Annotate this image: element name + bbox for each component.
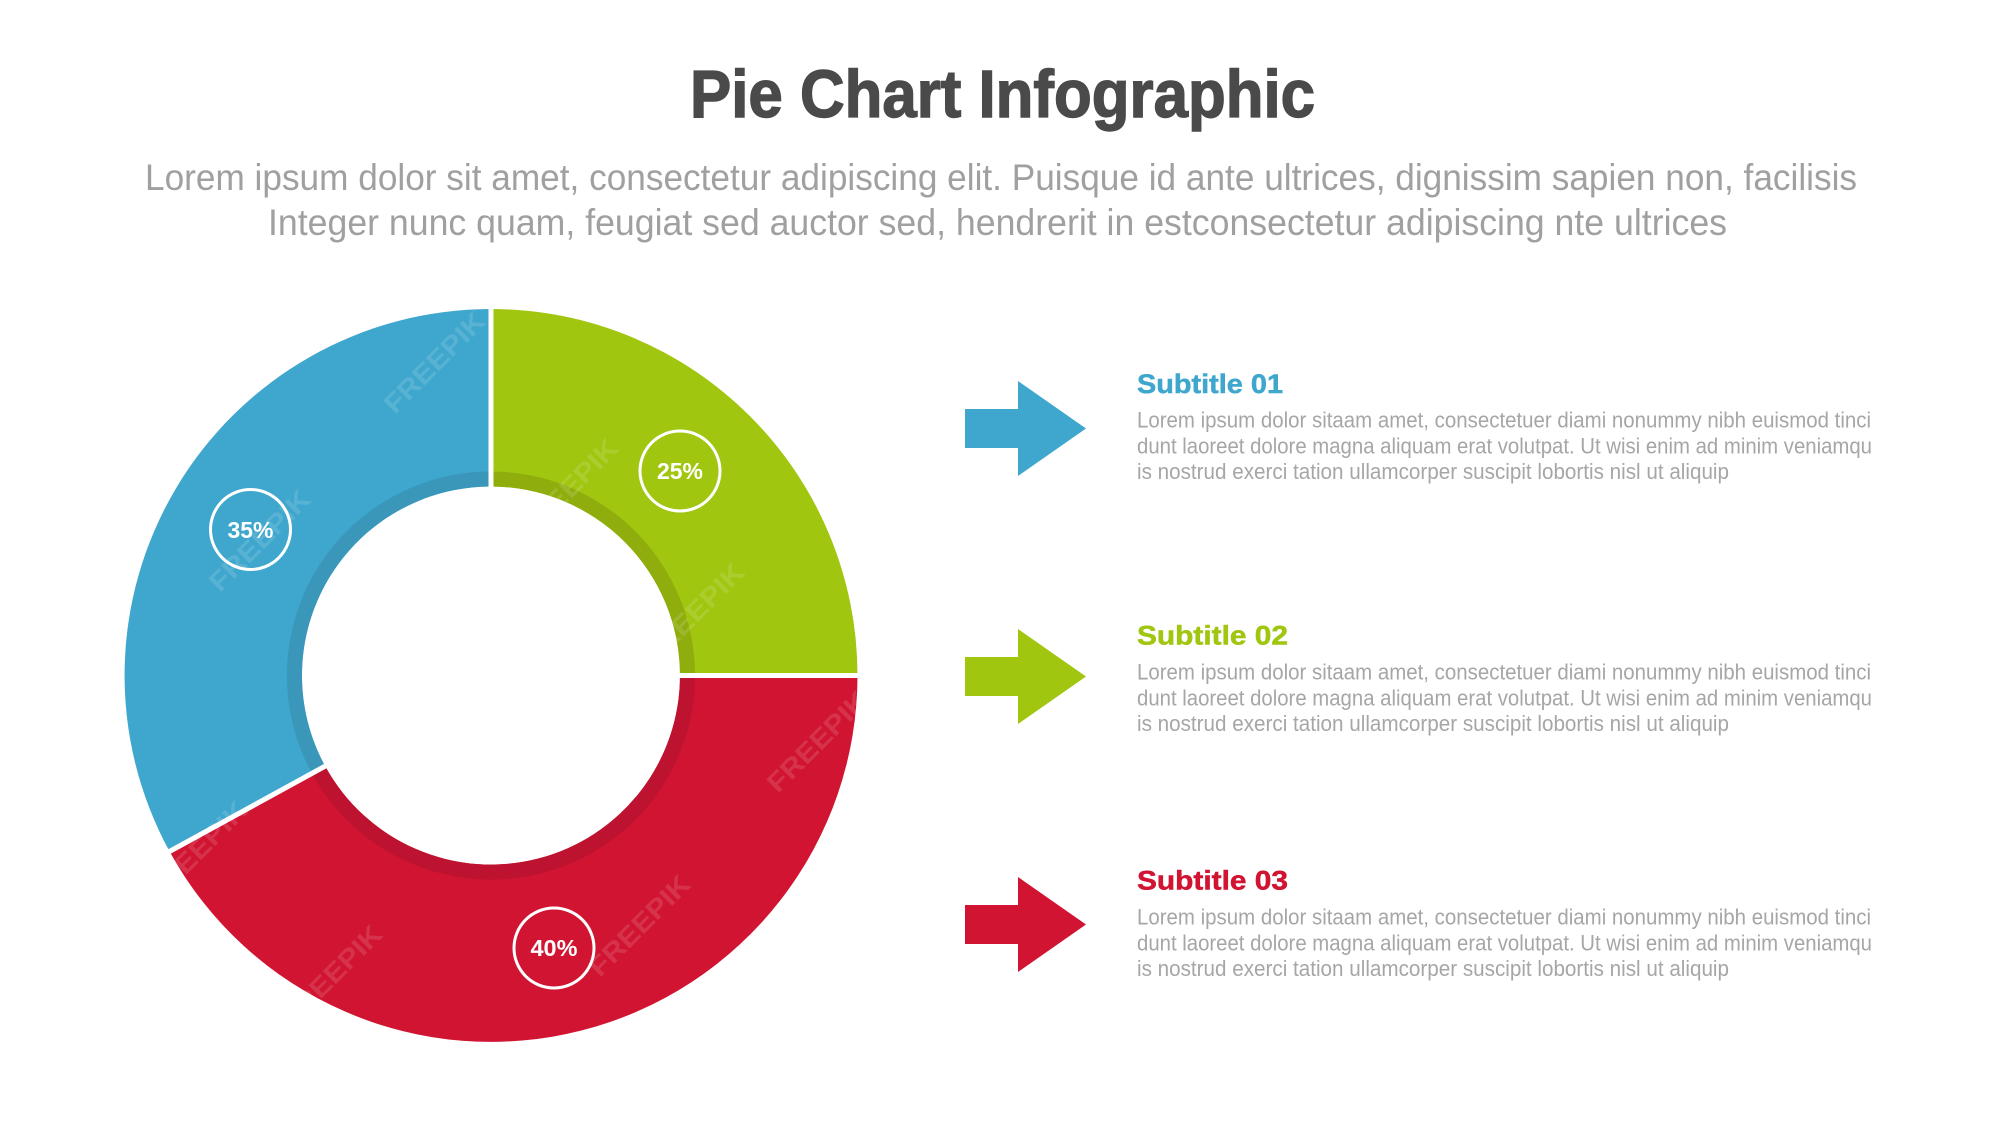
watermarks: FREEPIK	[203, 484, 317, 597]
badge: 35%: 35%	[228, 517, 274, 543]
text block: subtitle 02: Subtitle 02	[1137, 620, 1288, 650]
watermarks: FREEPIK	[378, 306, 492, 419]
text block: subtitle 01: Subtitle 01	[1137, 369, 1283, 399]
text block: subtitle 02: Lorem ipsum dolor sitaam amet, consectetuer diami nonummy nibh euismod tinci	[1137, 660, 1871, 684]
segment dividers	[164, 304, 862, 854]
intro text: Lorem ipsum dolor sit amet, consectetur adipiscing elit. Puisque id ante ultrices, dignissim sapien non, facilisis	[145, 157, 1857, 198]
watermarks	[140, 306, 875, 1032]
arrow: green	[965, 629, 1086, 724]
arrow: red	[965, 877, 1086, 972]
donut chart	[125, 304, 875, 1042]
watermarks: FREEPIK	[637, 557, 751, 670]
segment: blue 35%	[125, 309, 491, 852]
text block: subtitle 03: Lorem ipsum dolor sitaam amet, consectetuer diami nonummy nibh euismod tinci	[1137, 904, 1871, 930]
text block: subtitle 03: is nostrud exerci tation ullamcorper suscipit lobortis nisl ut aliquip	[1137, 956, 1729, 981]
watermarks: FREEPIK	[583, 869, 697, 982]
inner shadow band: green	[491, 472, 695, 676]
text block: subtitle 03: dunt laoreet dolore magna aliquam erat volutpat. Ut wisi enim ad minim veniamqu	[1137, 930, 1872, 956]
title: Pie Chart Infographic	[690, 57, 1315, 132]
segment: green 25%	[491, 309, 858, 676]
arrow: blue	[965, 381, 1086, 476]
text block: subtitle 01	[1137, 369, 1872, 484]
segment: red 40%	[170, 676, 858, 1042]
text block: subtitle 03	[1137, 866, 1872, 981]
badge: 40%: 40%	[530, 935, 578, 961]
watermarks: FREEPIK	[511, 433, 625, 546]
text block: subtitle 02: is nostrud exerci tation ullamcorper suscipit lobortis nisl ut aliquip	[1137, 711, 1729, 736]
badge: 25%	[640, 431, 720, 511]
text block: subtitle 01: Lorem ipsum dolor sitaam amet, consectetuer diami nonummy nibh euismod tinci	[1137, 408, 1871, 432]
watermarks: FREEPIK	[761, 685, 875, 798]
watermarks: FREEPIK	[140, 795, 254, 908]
badge: 35%	[210, 490, 290, 570]
intro text	[145, 157, 1857, 243]
inner shadow band: red	[312, 676, 695, 880]
text block: subtitle 03: Subtitle 03	[1137, 866, 1288, 896]
text block: subtitle 02	[1137, 620, 1872, 736]
text block: subtitle 01: is nostrud exerci tation ullamcorper suscipit lobortis nisl ut aliquip	[1137, 459, 1729, 484]
text block: subtitle 01: dunt laoreet dolore magna aliquam erat volutpat. Ut wisi enim ad minim veniamqu	[1137, 434, 1872, 458]
watermarks: FREEPIK	[275, 919, 389, 1032]
text block: subtitle 02: dunt laoreet dolore magna aliquam erat volutpat. Ut wisi enim ad minim veniamqu	[1137, 686, 1872, 710]
badge: 25%: 25%	[657, 458, 703, 484]
inner shadow band: blue	[287, 471, 491, 774]
intro text: Integer nunc quam, feugiat sed auctor sed, hendrerit in estconsectetur adipiscing nte ultrices	[268, 202, 1727, 243]
badge: 40%	[514, 908, 594, 988]
